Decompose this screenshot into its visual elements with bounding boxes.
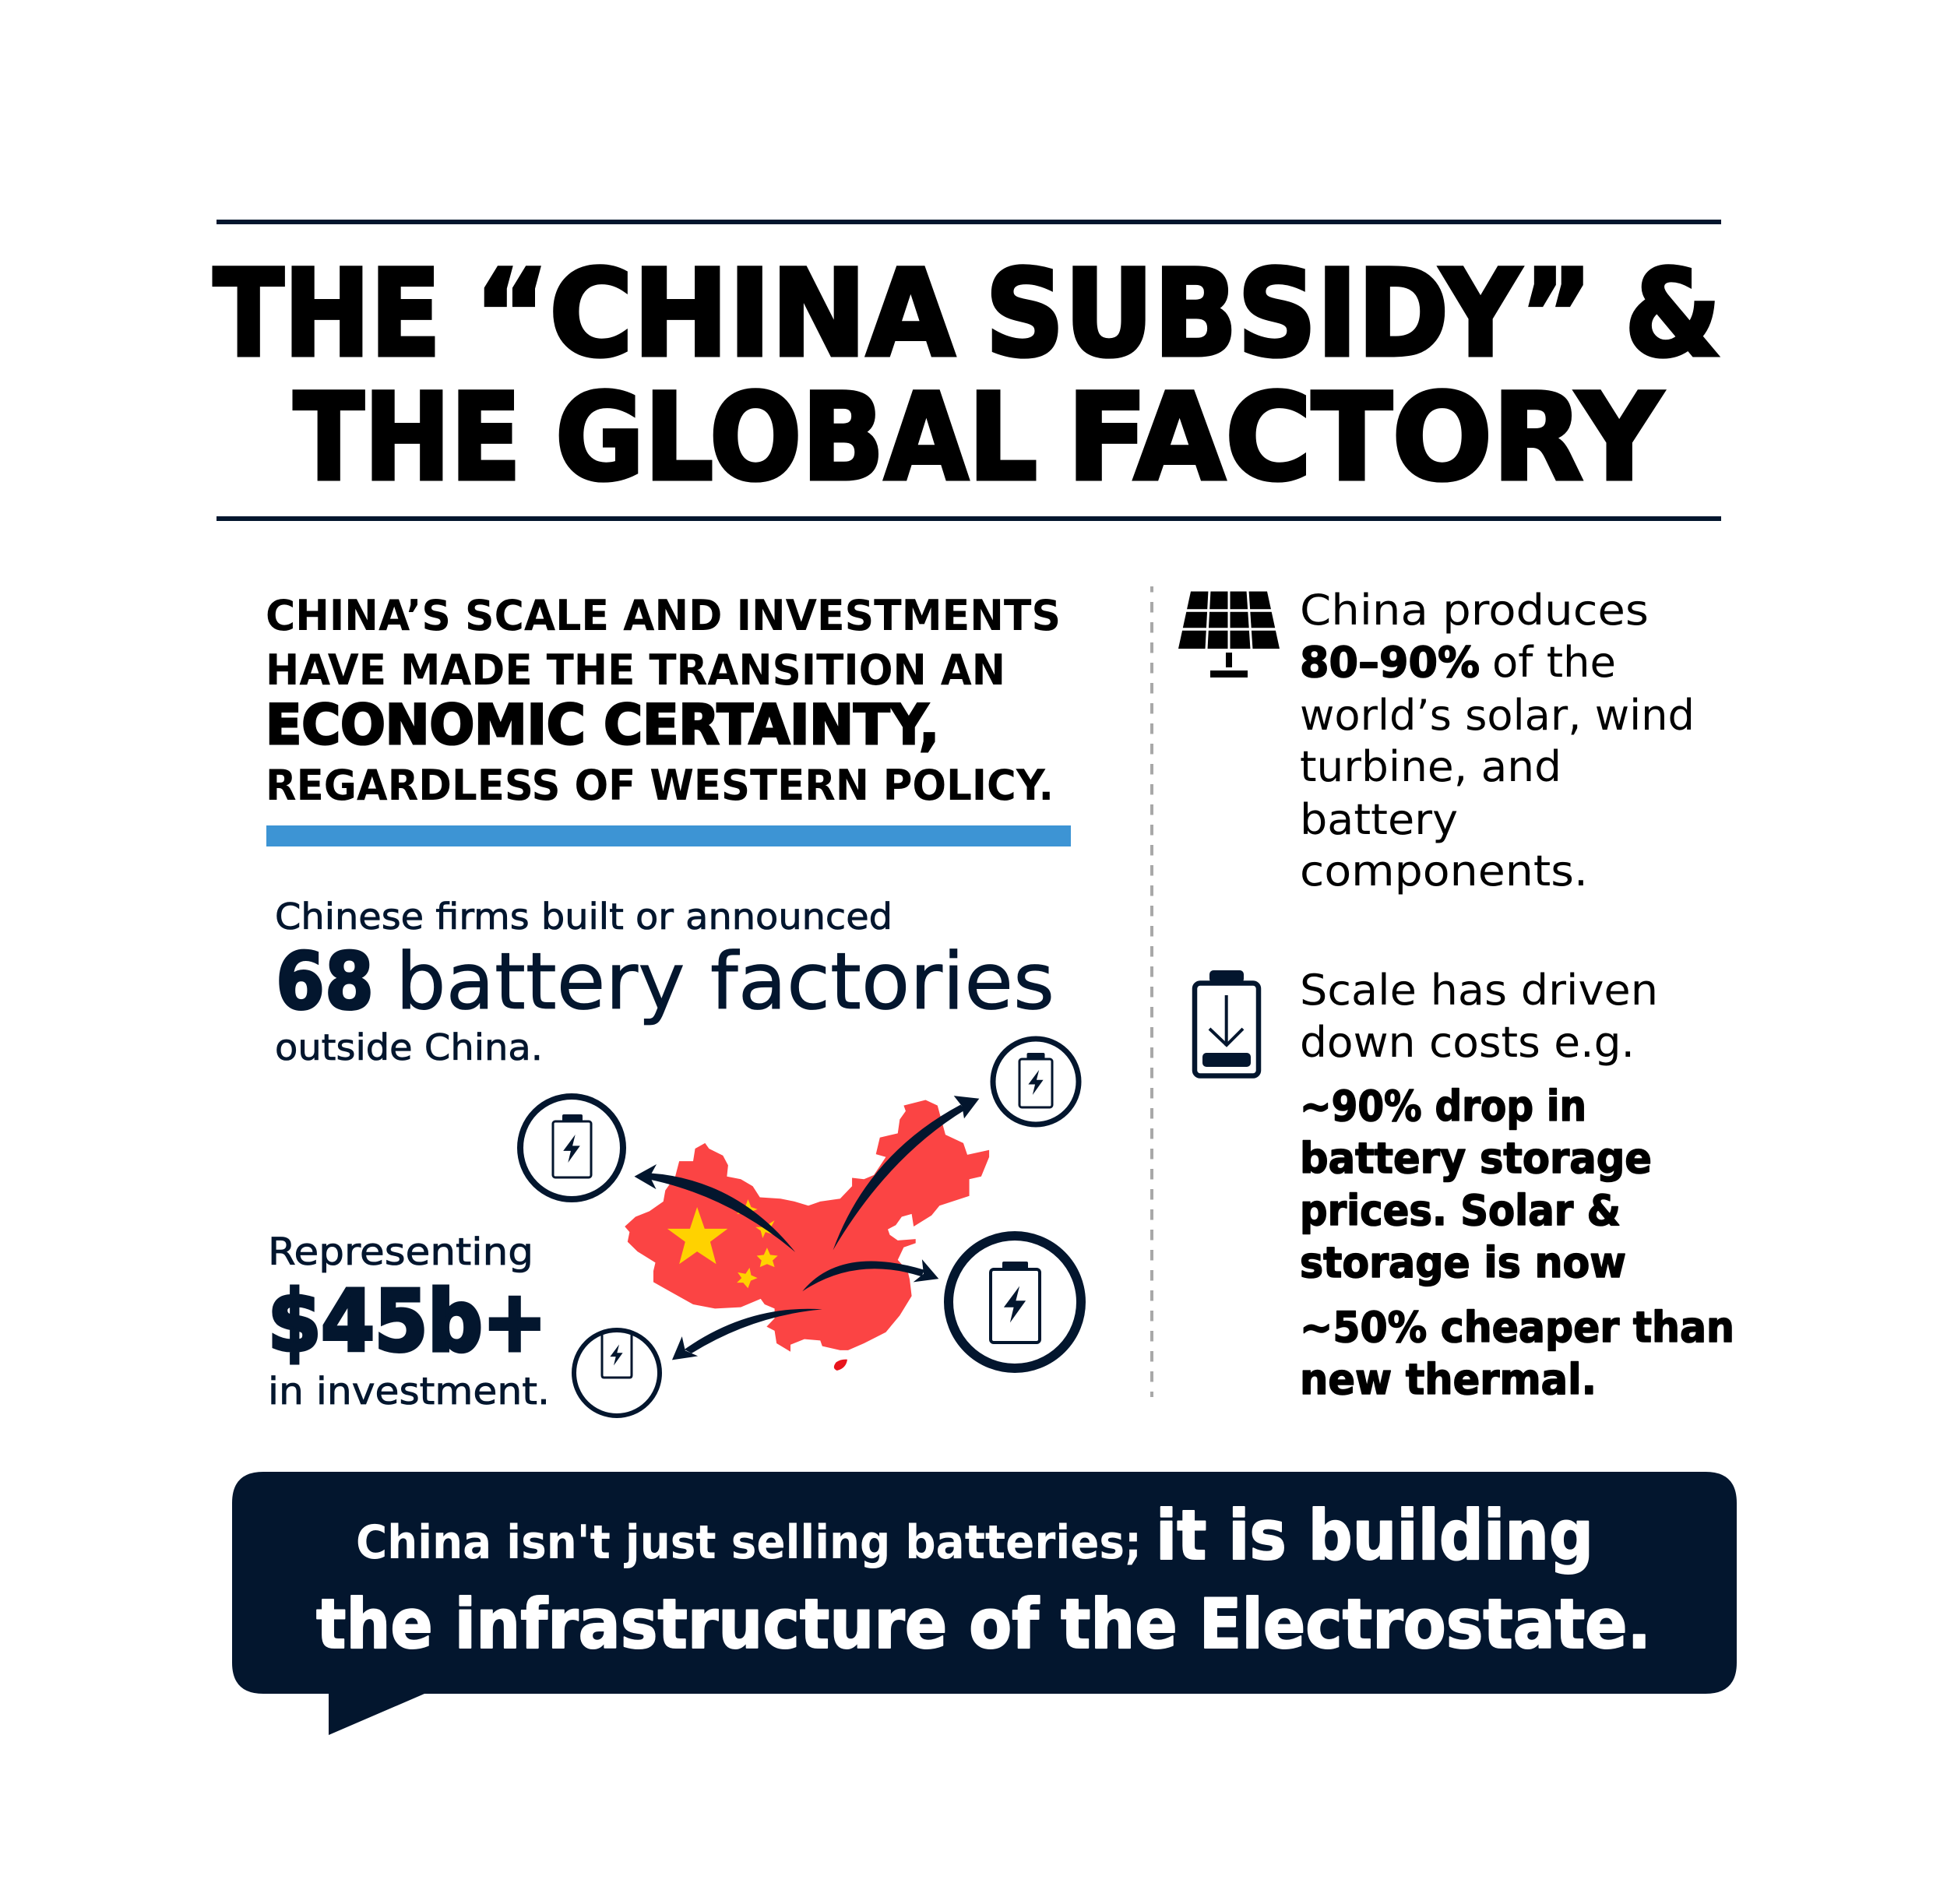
title: & (1625, 245, 1721, 384)
text: falling costs: storage is now (1300, 1238, 1626, 1287)
text: falling costs: Scale has driven (1300, 966, 1658, 1015)
stat: $45b+ investment: Representing (268, 1230, 533, 1274)
text: falling costs: new thermal. (1300, 1355, 1597, 1404)
text: falling costs: ~90% drop in (1300, 1082, 1586, 1131)
text: production share: battery (1300, 795, 1458, 844)
text: production share: turbine, and (1300, 742, 1561, 791)
left headline (266, 591, 1061, 810)
battery circle: top right (993, 1039, 1079, 1124)
title: SUBSIDY” (985, 245, 1593, 384)
callout banner: the infrastructure of the Electrostate. (316, 1584, 1651, 1664)
text: production share: China produces (1300, 586, 1649, 635)
stat: 68 battery factories: outside China. (275, 1026, 543, 1068)
text: production share (1300, 586, 1695, 896)
stat: $45b+ investment (268, 1230, 550, 1413)
text: production share: of the (1492, 638, 1616, 687)
flag stars (667, 1199, 778, 1288)
stat: 68 battery factories: Chinese firms built or announced (275, 896, 893, 938)
left headline: ECONOMIC CERTAINTY, (266, 693, 939, 757)
text: falling costs (1300, 966, 1734, 1404)
left headline: HAVE MADE THE TRANSITION AN (266, 646, 1005, 695)
left headline: REGARDLESS OF WESTERN POLICY. (266, 761, 1054, 810)
china map (625, 1100, 989, 1371)
stat: 68 battery factories (275, 896, 1054, 1068)
callout banner: China isn't just selling batteries; (356, 1515, 1142, 1570)
blue accent bar (266, 825, 1071, 846)
text: falling costs: battery storage (1300, 1134, 1652, 1183)
text: falling costs: ~50% cheaper than (1300, 1303, 1734, 1352)
title (213, 220, 1721, 521)
stat: 68 battery factories: battery factories (396, 935, 1054, 1027)
title: GLOBAL (555, 368, 1037, 508)
icon: solar panel (1176, 590, 1282, 677)
arrows from china (634, 1096, 979, 1360)
left headline: CHINA’S SCALE AND INVESTMENTS (266, 591, 1061, 640)
text: falling costs: prices. Solar & (1300, 1186, 1621, 1235)
text: production share: world’s solar, wind (1300, 691, 1695, 740)
callout banner: it is building (1156, 1495, 1593, 1575)
title: “CHINA (474, 245, 955, 384)
text: production share: 80–90% (1300, 638, 1480, 687)
stat: $45b+ investment: $45b+ (268, 1273, 547, 1371)
icon: battery with down arrow (1195, 970, 1259, 1076)
battery circle: right large (949, 1236, 1081, 1368)
text: falling costs: down costs e.g. (1300, 1018, 1635, 1067)
callout banner (232, 1472, 1737, 1735)
stat: $45b+ investment: in investment. (268, 1370, 550, 1413)
title: THE (213, 245, 441, 384)
title: THE (294, 368, 521, 508)
battery circle: left (520, 1096, 623, 1199)
battery circle: bottom left (574, 1330, 660, 1416)
text: production share: components. (1300, 846, 1588, 896)
stat: 68 battery factories: 68 (276, 935, 374, 1027)
title: FACTORY (1067, 368, 1664, 508)
